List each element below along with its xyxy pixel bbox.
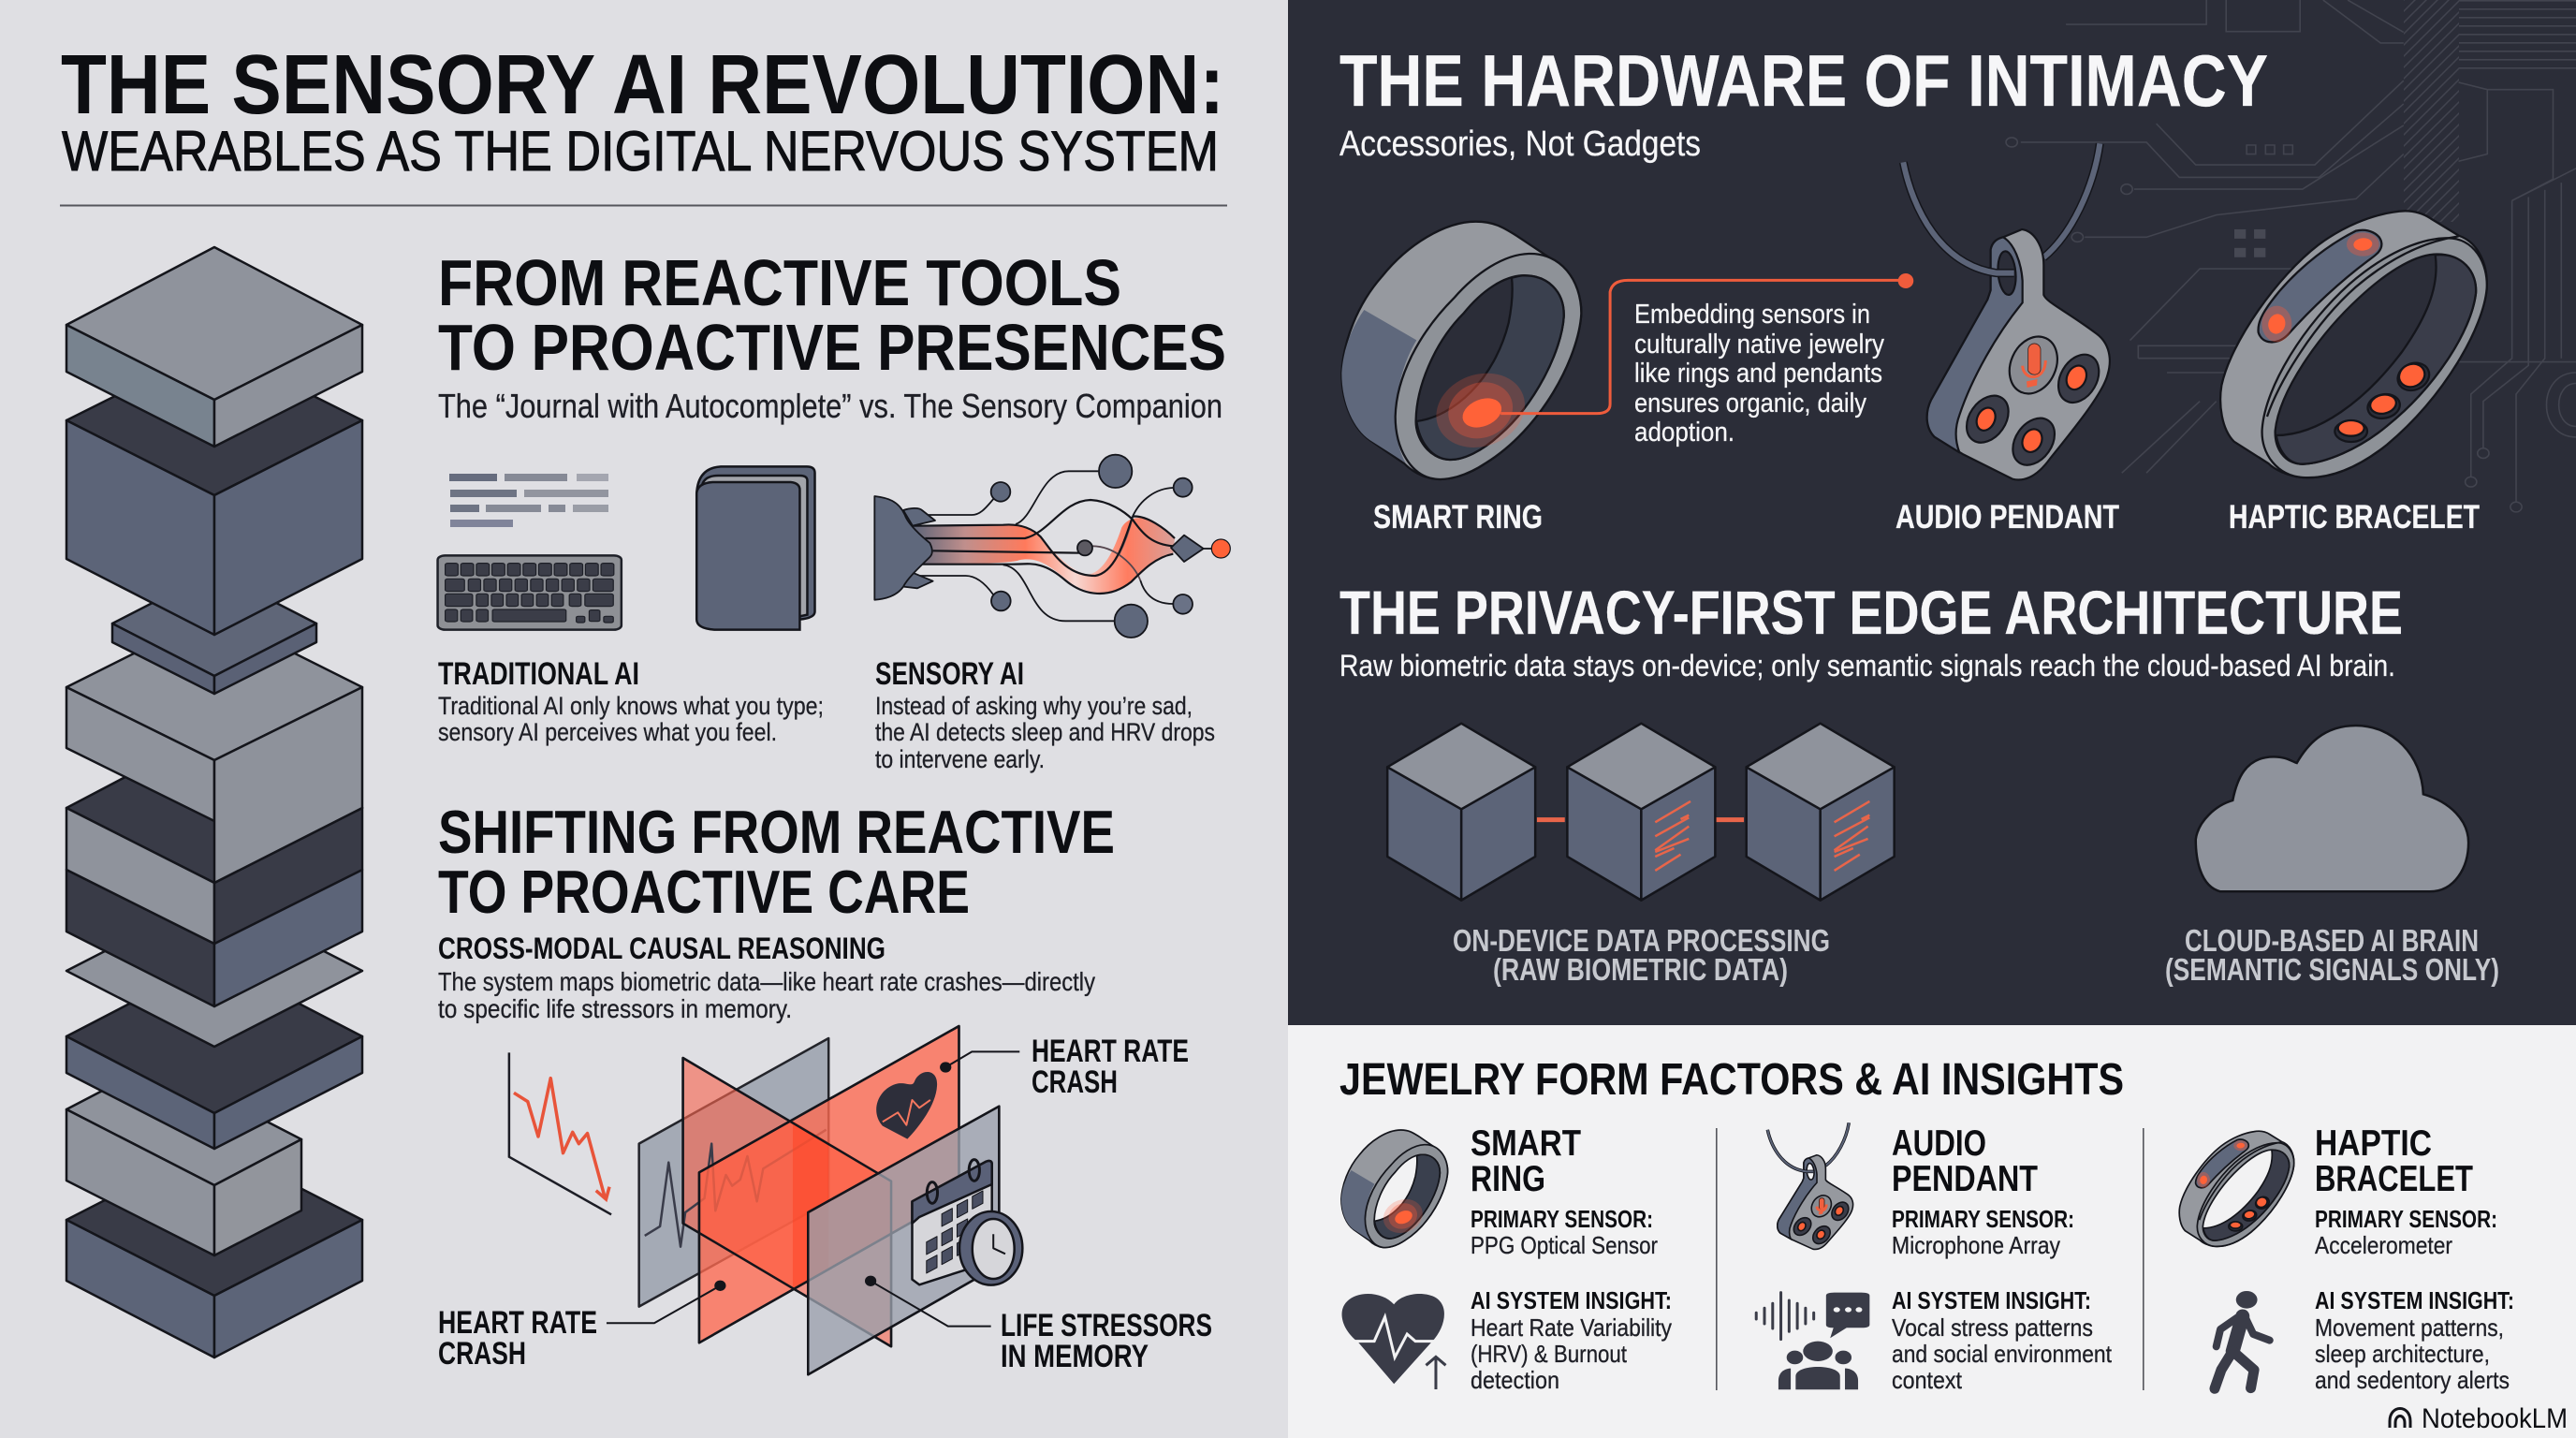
text block: traditional AI: TRADITIONAL AI xyxy=(438,656,639,692)
heading: from reactive tools: FROM REACTIVE TOOLS xyxy=(438,246,1121,319)
callout: life stressors in memory: LIFE STRESSORS xyxy=(1001,1308,1212,1343)
AI system insight: (HRV) & Burnout xyxy=(1471,1340,1628,1368)
text block: traditional AI: sensory AI perceives what you feel. xyxy=(438,718,777,746)
AI system insight: Heart Rate Variability xyxy=(1471,1313,1672,1342)
text block: traditional AI: Traditional AI only knows what you type; xyxy=(438,692,824,720)
heading: from reactive tools: TO PROACTIVE PRESENCES xyxy=(438,311,1226,384)
primary sensor xyxy=(1471,1205,1658,1259)
name xyxy=(1892,1123,2038,1199)
AI system insight xyxy=(1892,1286,2113,1394)
icon: mini ring xyxy=(1341,1130,1448,1248)
primary sensor: Microphone Array xyxy=(1892,1231,2060,1259)
label: on-device data processing xyxy=(1453,923,1830,987)
callout line: ring to text xyxy=(1500,273,1913,414)
title xyxy=(61,38,1224,183)
icon: mini bracelet xyxy=(2179,1131,2294,1246)
primary sensor: PPG Optical Sensor xyxy=(1471,1231,1658,1259)
AI system insight: Movement patterns, xyxy=(2315,1313,2504,1342)
label: on-device data processing: ON-DEVICE DATA PROCESSING xyxy=(1453,923,1830,958)
diagram: on-device processing cubes xyxy=(1387,724,1895,901)
AI system insight: detection xyxy=(1471,1366,1559,1394)
text block: embedding sensors: culturally native jewelry xyxy=(1634,330,1884,360)
text block: traditional AI xyxy=(438,656,824,746)
name: BRACELET xyxy=(2315,1159,2473,1199)
heading: from reactive tools xyxy=(438,246,1226,384)
text block: cross-modal causal reasoning: to specific life stressors in memory. xyxy=(438,994,792,1023)
text block: sensory AI: SENSORY AI xyxy=(875,656,1024,692)
text block: cross-modal causal reasoning: CROSS-MODAL CAUSAL REASONING xyxy=(438,932,886,965)
callout: heart rate crash (top) xyxy=(940,1034,1189,1100)
heading: shifting to proactive care: TO PROACTIVE CARE xyxy=(438,858,970,926)
label: cloud-based AI brain: CLOUD-BASED AI BRAIN xyxy=(2185,923,2479,958)
text block: embedding sensors: adoption. xyxy=(1634,418,1734,448)
subheading: accessories, not gadgets: Accessories, Not Gadgets xyxy=(1339,125,1701,164)
panel: sensory AI revolution (left) xyxy=(0,0,1288,1438)
label: on-device data processing: (RAW BIOMETRIC DATA) xyxy=(1493,952,1788,987)
text block: embedding sensors: ensures organic, daily xyxy=(1634,389,1866,418)
text block: sensory AI xyxy=(875,656,1215,773)
label: cloud-based AI brain xyxy=(2165,923,2499,987)
AI system insight: AI SYSTEM INSIGHT: xyxy=(1892,1286,2091,1314)
illustration: smart ring xyxy=(1341,222,1581,479)
panel: hardware and privacy (dark) xyxy=(1288,0,2576,1025)
illustration: haptic bracelet xyxy=(2220,211,2487,477)
icon: keyboard xyxy=(438,555,622,630)
label: audio pendant: AUDIO PENDANT xyxy=(1895,499,2119,536)
AI system insight: context xyxy=(1892,1366,1963,1394)
name: SMART xyxy=(1471,1123,1581,1164)
subheading: raw biometric data: Raw biometric data stays on-device; only semantic signals reach the cloud-based AI brain. xyxy=(1339,649,2395,682)
icon: heart with pulse and arrow xyxy=(1342,1294,1445,1389)
callout: heart rate crash (top): HEART RATE xyxy=(1032,1034,1189,1069)
icon: cloud xyxy=(2196,726,2468,891)
panel: jewelry form factors xyxy=(1288,1025,2576,1438)
text block: embedding sensors: like rings and pendants xyxy=(1634,359,1882,389)
label: smart ring: SMART RING xyxy=(1373,499,1543,536)
icon: calendar and clock xyxy=(912,1160,1022,1285)
AI system insight: sleep architecture, xyxy=(2315,1340,2490,1368)
icon: sensory AI neural flow xyxy=(874,455,1230,638)
primary sensor xyxy=(2315,1205,2497,1259)
name xyxy=(2315,1123,2473,1199)
column: haptic bracelet xyxy=(2179,1123,2514,1394)
name: RING xyxy=(1471,1159,1545,1199)
label: haptic bracelet: HAPTIC BRACELET xyxy=(2229,499,2480,536)
AI system insight: and social environment xyxy=(1892,1340,2113,1368)
AI system insight xyxy=(2315,1286,2514,1394)
primary sensor: PRIMARY SENSOR: xyxy=(2315,1205,2497,1233)
name xyxy=(1471,1123,1581,1199)
heading: shifting to proactive care xyxy=(438,798,1115,926)
diagram: intersecting data planes xyxy=(639,1026,1022,1374)
name: HAPTIC xyxy=(2315,1123,2432,1164)
text block: sensory AI: the AI detects sleep and HRV drops xyxy=(875,718,1215,746)
heading: the hardware of intimacy: THE HARDWARE OF INTIMACY xyxy=(1339,39,2268,122)
primary sensor: PRIMARY SENSOR: xyxy=(1892,1205,2074,1233)
text block: sensory AI: to intervene early. xyxy=(875,745,1045,773)
title: THE SENSORY AI REVOLUTION: xyxy=(61,38,1224,132)
name: PENDANT xyxy=(1892,1159,2038,1199)
callout: life stressors in memory xyxy=(865,1276,1212,1374)
text block: cross-modal causal reasoning: The system maps biometric data—like heart rate crashes—directly xyxy=(438,967,1095,996)
callout: heart rate crash (bottom): HEART RATE xyxy=(438,1305,597,1341)
icon: walking person xyxy=(2215,1291,2270,1388)
text block: embedding sensors xyxy=(1634,300,1884,448)
illustration: audio pendant xyxy=(1903,143,2110,479)
AI system insight: and sedentory alerts xyxy=(2315,1366,2510,1394)
heading: shifting to proactive care: SHIFTING FROM REACTIVE xyxy=(438,798,1115,866)
text block: sensory AI: Instead of asking why you’re sad, xyxy=(875,692,1193,720)
column: smart ring xyxy=(1341,1123,1672,1394)
AI system insight xyxy=(1471,1286,1672,1394)
heading: jewelry form factors: JEWELRY FORM FACTORS & AI INSIGHTS xyxy=(1339,1055,2124,1105)
illustration: isometric layered stack xyxy=(66,247,362,1357)
AI system insight: AI SYSTEM INSIGHT: xyxy=(2315,1286,2514,1314)
icon: heart with pulse xyxy=(876,1072,937,1139)
subheading: journal vs companion: The “Journal with Autocomplete” vs. The Sensory Companion xyxy=(438,387,1222,425)
primary sensor: Accelerometer xyxy=(2315,1231,2452,1259)
callout: heart rate crash (bottom) xyxy=(438,1281,726,1372)
primary sensor xyxy=(1892,1205,2074,1259)
title: WEARABLES AS THE DIGITAL NERVOUS SYSTEM xyxy=(62,120,1219,183)
callout: heart rate crash (bottom): CRASH xyxy=(438,1336,526,1372)
icon: book xyxy=(696,466,814,630)
callout: life stressors in memory: IN MEMORY xyxy=(1001,1339,1149,1374)
text block: embedding sensors: Embedding sensors in xyxy=(1634,300,1870,330)
AI system insight: Vocal stress patterns xyxy=(1892,1313,2093,1342)
name: AUDIO xyxy=(1892,1123,1986,1164)
icon: typed text lines xyxy=(449,474,608,527)
icon: voice waves, speech bubble and people xyxy=(1756,1293,1869,1389)
label: cloud-based AI brain: (SEMANTIC SIGNALS ONLY) xyxy=(2165,952,2499,987)
icon: mini pendant xyxy=(1767,1123,1853,1249)
column: audio pendant xyxy=(1756,1123,2113,1394)
text block: cross-modal causal reasoning xyxy=(438,932,1095,1023)
callout: heart rate crash (top): CRASH xyxy=(1032,1064,1118,1100)
AI system insight: AI SYSTEM INSIGHT: xyxy=(1471,1286,1672,1314)
chart: heart rate decline line xyxy=(509,1052,611,1214)
primary sensor: PRIMARY SENSOR: xyxy=(1471,1205,1653,1233)
